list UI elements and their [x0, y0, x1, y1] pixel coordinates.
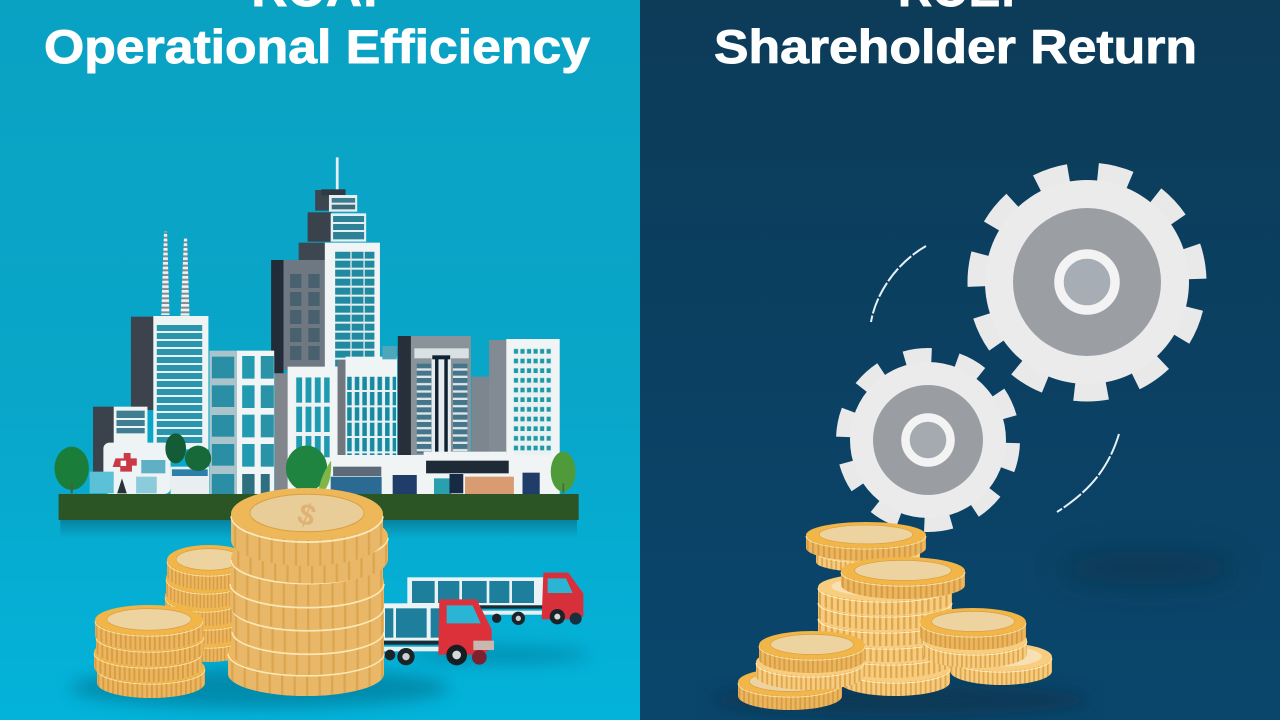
- coin: second pile top: [841, 557, 965, 599]
- dashed rotation arc: upper: [871, 246, 926, 322]
- heading: ROE Shareholder Return: [714, 0, 1197, 73]
- shadow: ROE coin piles: [710, 684, 1090, 716]
- low left building: [93, 407, 147, 473]
- left twin-antenna tower: [131, 232, 208, 449]
- coin stack: left pile: [738, 631, 865, 710]
- dark right tower: [398, 336, 471, 459]
- ground shadow: [60, 518, 577, 538]
- illustration: delivery trucks: [382, 573, 583, 665]
- coin stack: small left: [94, 605, 205, 698]
- panel: ROA background: [0, 0, 640, 720]
- front truck: [382, 599, 494, 665]
- dashed rotation arc: lower: [1057, 434, 1119, 512]
- coin stack: tall front: [228, 488, 388, 696]
- icon: small gear: [824, 336, 1032, 544]
- mid-left office block: [209, 351, 274, 494]
- coin pile: central: [818, 573, 952, 696]
- panel: ROE background: [640, 0, 1280, 720]
- coin dollar mark: $: [294, 497, 320, 534]
- low-rise street buildings: [331, 452, 560, 494]
- low-rise hospital block: [90, 443, 209, 494]
- icon: large gear: [967, 162, 1207, 402]
- right white tower: [472, 339, 560, 459]
- trees: [54, 433, 576, 493]
- shadow: trucks: [410, 646, 590, 664]
- shadow: gears on floor: [1060, 551, 1236, 585]
- heading: ROA Operational Efficiency: Operational Efficiency: [44, 20, 590, 73]
- rear truck: [407, 573, 583, 625]
- coin stack: medium left: [165, 545, 251, 662]
- coin: top of central pile: [806, 522, 926, 572]
- heading: ROE Shareholder Return: Shareholder Return: [714, 20, 1197, 73]
- ground strip: [59, 494, 579, 520]
- main tower: [271, 157, 380, 373]
- coin stack: right pile: [920, 608, 1052, 685]
- illustration: city skyline on ground: [54, 157, 579, 538]
- centre buildings: [275, 346, 397, 494]
- heading: ROA Operational Efficiency: [44, 0, 590, 73]
- shadow: left coin stacks: [70, 668, 450, 708]
